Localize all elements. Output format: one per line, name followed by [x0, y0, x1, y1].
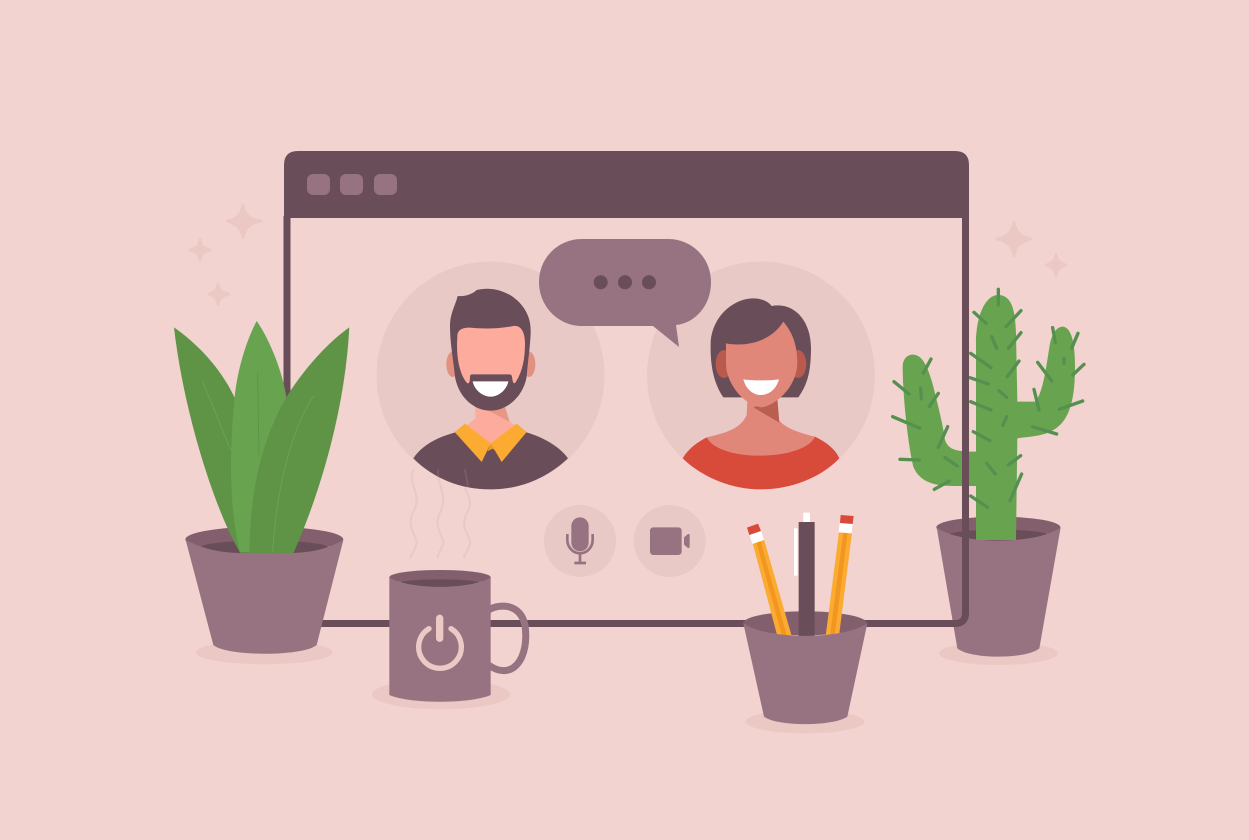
mug body [389, 577, 491, 702]
avatar circle [647, 261, 875, 489]
mug handle [488, 606, 526, 671]
man face [457, 326, 525, 383]
mug shadow [372, 679, 510, 709]
cactus in pot [893, 289, 1084, 665]
window title bar [284, 151, 969, 218]
mug rim [389, 570, 491, 585]
coffee mug [372, 570, 526, 709]
cup rim [743, 611, 867, 635]
left pencil [747, 524, 792, 636]
woman neck and shoulders [707, 402, 815, 457]
man hair and beard [450, 289, 531, 411]
cactus body [903, 295, 1075, 540]
icon: sparkles left [190, 205, 261, 305]
pot shadow [939, 642, 1058, 665]
woman ears [716, 350, 732, 378]
icon: power symbol [419, 618, 461, 668]
man ears [446, 352, 459, 377]
cactus spines [893, 289, 1084, 507]
avatar: woman [647, 261, 875, 489]
plant in pot [174, 321, 349, 664]
steam above mug [411, 470, 470, 557]
avatar circle [376, 261, 604, 489]
pot rim [185, 527, 343, 552]
speech bubble [539, 239, 711, 347]
woman smile [743, 379, 779, 395]
pot body [186, 540, 343, 654]
pen [794, 513, 815, 636]
window frame [287, 216, 966, 624]
cup shadow [746, 710, 864, 733]
steam over sweater [438, 470, 470, 503]
pot shadow [196, 640, 333, 664]
pot rim [936, 517, 1060, 538]
pot body [937, 527, 1061, 657]
icon: sparkles right [997, 222, 1066, 276]
typing dots [594, 275, 656, 289]
cup body [743, 623, 867, 724]
icon: microphone button [544, 505, 616, 577]
right leaf [249, 327, 349, 553]
icon: video camera button [634, 505, 706, 577]
avatar: man [376, 261, 604, 489]
woman sweater [683, 437, 839, 489]
window buttons [307, 174, 397, 195]
woman face [726, 322, 797, 407]
woman hair [711, 298, 811, 397]
man collar [455, 424, 527, 462]
back left leaf [174, 327, 240, 553]
man neck [465, 405, 517, 445]
right pencil [826, 515, 854, 636]
pencil cup [743, 513, 867, 733]
man smile [473, 381, 508, 397]
middle leaf [231, 321, 287, 553]
browser window [284, 151, 969, 624]
man sweater [413, 432, 568, 489]
